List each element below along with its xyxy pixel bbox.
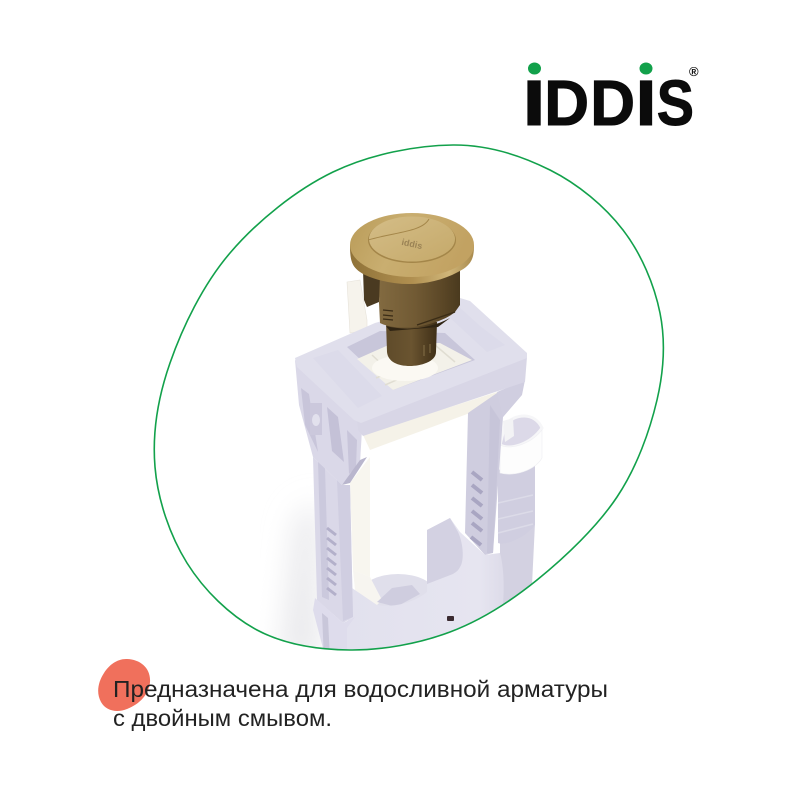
caption line 2: с двойным смывом. [113,705,332,731]
logo green dots [528,62,652,74]
white ring collar [500,416,542,447]
logo letter D: D [544,67,589,139]
left ribbed bracket [295,360,367,485]
base tower face [427,518,463,584]
brown button body [363,268,460,331]
top frame plate [295,298,527,436]
frame top face [295,298,527,423]
base with U cut-out [347,518,504,660]
logo letter S: S [657,67,694,139]
logo letter I: I [635,67,657,139]
post slots [327,528,336,595]
frame front edge [357,357,527,436]
bowl behind base [353,570,427,606]
button cap [368,228,456,263]
frame window [347,331,475,390]
green blob outline [154,145,663,650]
white rear rods [347,280,370,577]
photo: flush button on cistern frame inside organic blob [280,213,542,660]
logo letter D: D [590,67,635,139]
split line [368,219,429,240]
soft shadow left of the frame [279,515,322,647]
logo letter I: I [522,67,546,139]
cap brand mark: iddis [401,237,423,251]
overflow tube on the right [498,416,542,620]
registered mark: ® [689,64,699,79]
coral accent blob [98,659,150,711]
rear beam between posts [363,392,497,450]
caption [113,676,608,731]
brown lower stem [386,322,437,366]
base small marker [447,616,454,621]
logo: IDDIS [522,62,699,139]
right post [465,380,525,555]
post slots [471,472,482,545]
gold button head [350,213,474,284]
left post [313,457,355,660]
caption line 1: Предназначена для водосливной арматуры [113,676,608,702]
white mechanism in window [357,343,472,390]
